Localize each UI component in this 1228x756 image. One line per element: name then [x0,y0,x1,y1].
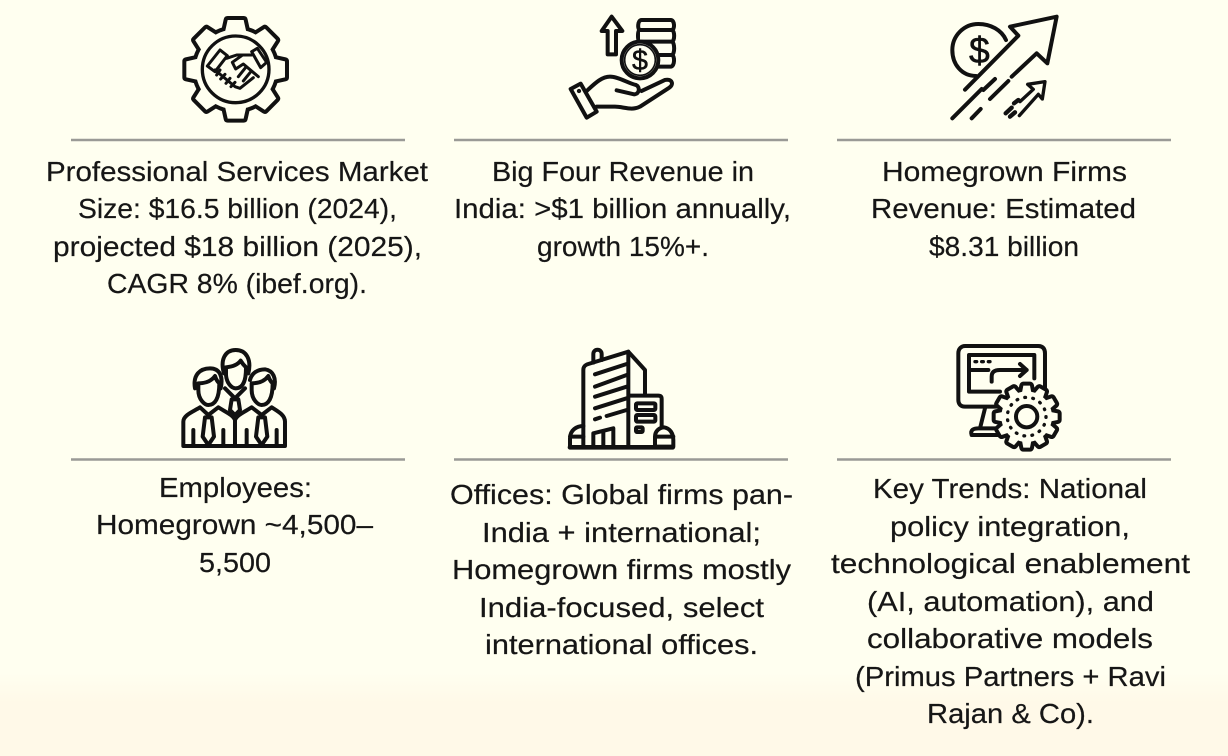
icon: dollar coin and rising arrows: $ [969,29,990,71]
panel: key trends [831,346,1190,729]
text: employees: 5,500 [199,547,271,578]
text: market size: Size: $16.5 billion (2024), [78,193,397,224]
panel: employees [71,350,405,578]
icon: computer with gear [958,346,1058,448]
text: homegrown revenue: Homegrown Firms [882,156,1127,187]
text: offices [450,479,793,660]
divider [71,458,405,461]
icon: dollar coin and rising arrows [952,17,1057,118]
icon: office buildings [570,350,673,447]
text: big four revenue: Big Four Revenue in [492,156,754,187]
panel: market size [46,20,428,299]
text: key trends: policy integration, [890,511,1130,542]
icon: three business people [183,350,285,446]
text: big four revenue [454,156,791,262]
text: market size: projected $18 billion (2025), [53,231,422,262]
panel: big four revenue [454,17,791,262]
text: key trends: Key Trends: National [873,473,1147,504]
text: market size [46,156,428,299]
divider [71,139,405,141]
icon: gear with handshake [186,20,285,119]
text: employees: Homegrown ~4,500– [96,509,374,540]
divider [837,458,1171,461]
text: offices: Homegrown firms mostly [452,554,791,585]
divider [454,458,788,461]
text: employees [96,472,374,578]
divider [454,139,788,141]
text: key trends [831,473,1190,729]
text: homegrown revenue: $8.31 billion [929,231,1079,262]
divider [837,139,1171,141]
text: key trends: collaborative models [867,623,1153,654]
text: big four revenue: growth 15%+. [537,231,709,262]
text: offices: India + international; [482,517,761,548]
text: key trends: (AI, automation), and [867,586,1154,617]
panel: offices [450,350,793,660]
text: key trends: Rajan & Co). [927,698,1094,729]
text: market size: CAGR 8% (ibef.org). [107,268,367,299]
text: offices: India-focused, select [479,592,764,623]
text: offices: international offices. [485,629,758,660]
icon: hand with coins: $ [632,45,648,77]
text: offices: Offices: Global firms pan- [450,479,793,510]
panel: homegrown revenue [837,17,1171,262]
text: big four revenue: India: >$1 billion annually, [454,193,791,224]
text: homegrown revenue [871,156,1136,262]
text: employees: Employees: [159,472,312,503]
icon: hand with coins [571,17,674,118]
text: market size: Professional Services Market [46,156,428,187]
text: homegrown revenue: Revenue: Estimated [871,193,1136,224]
text: key trends: (Primus Partners + Ravi [855,661,1166,692]
text: key trends: technological enablement [831,548,1190,579]
